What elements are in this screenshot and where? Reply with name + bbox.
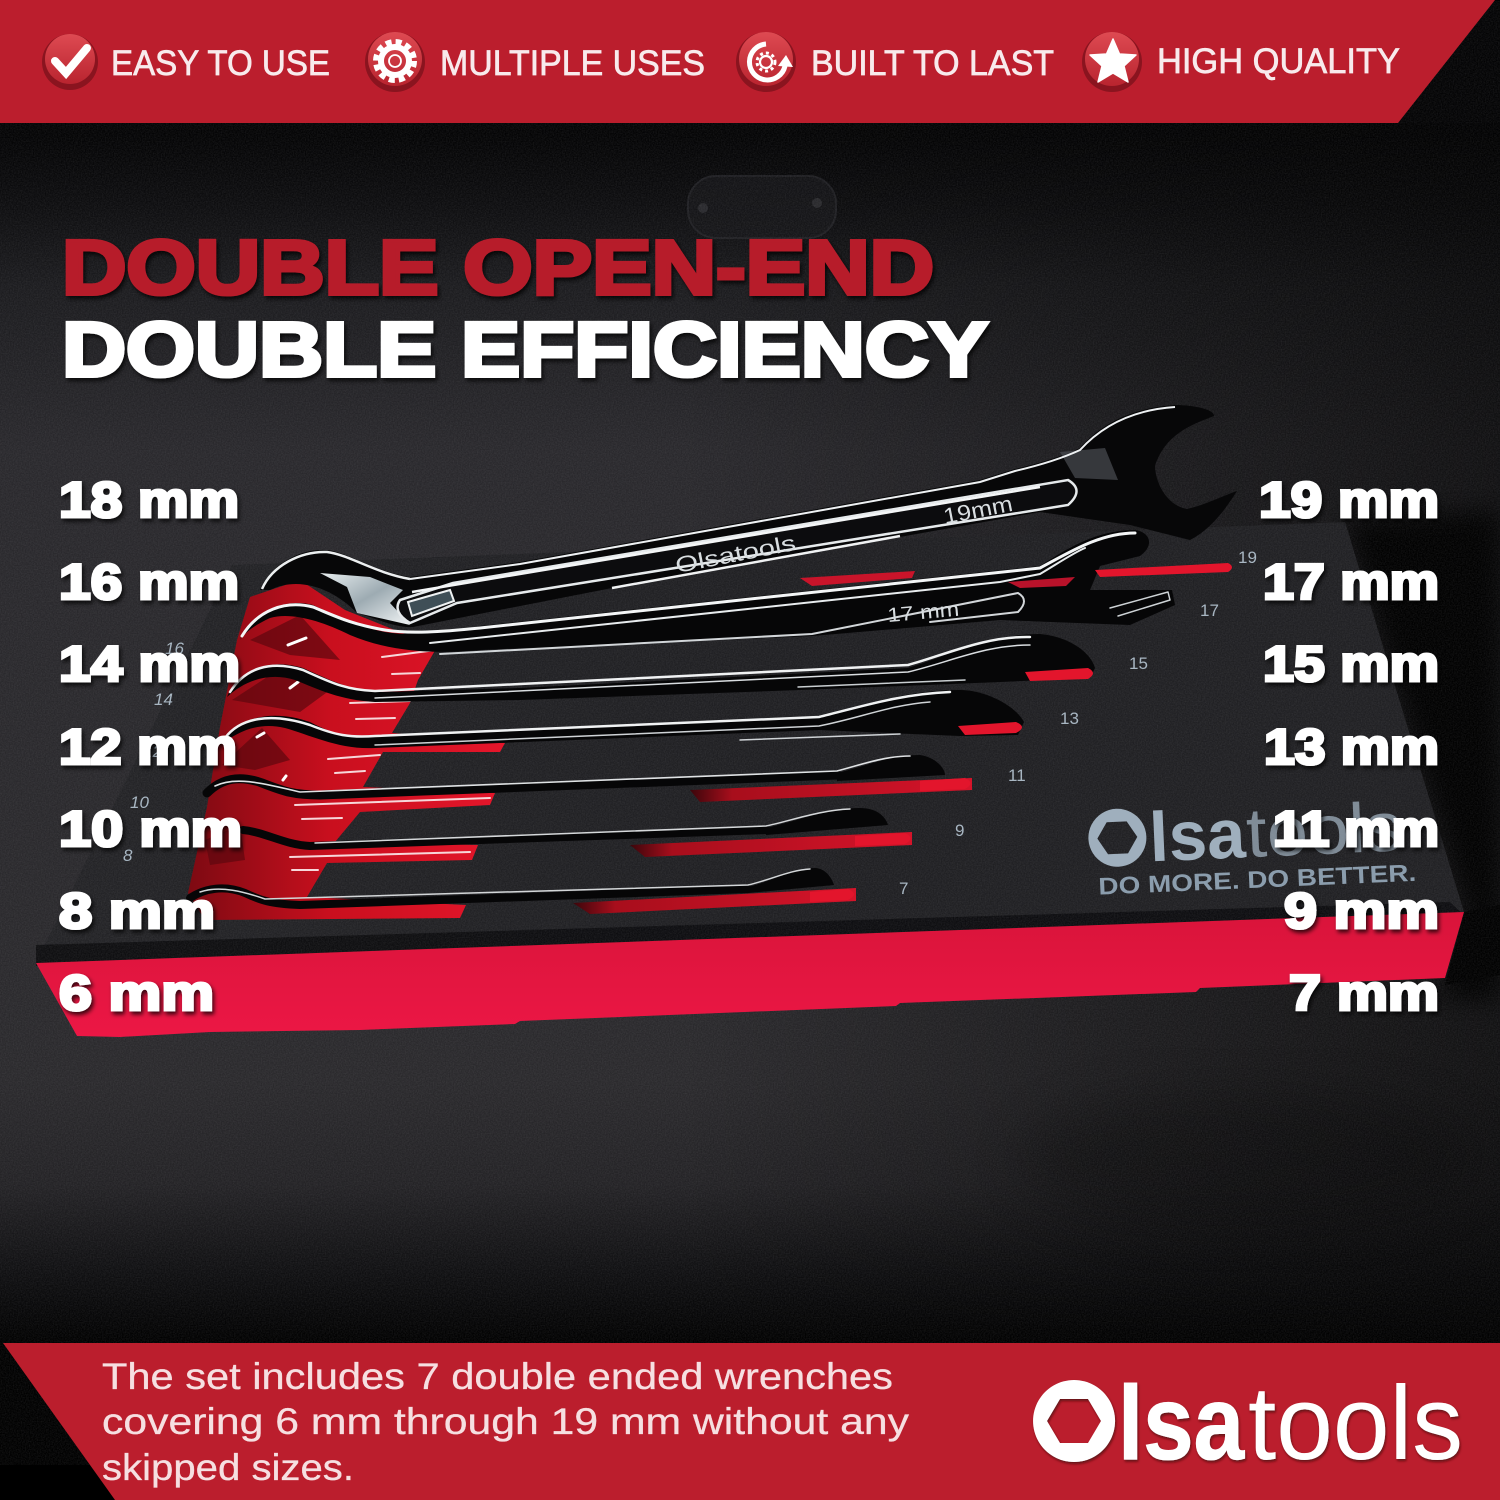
foam printed logo: lsa	[1148, 794, 1248, 876]
tray front dark lip	[36, 902, 1464, 966]
ring slot	[398, 480, 1076, 623]
shine lines	[262, 407, 1175, 592]
right size labels: 17 mm	[1263, 554, 1439, 610]
description text: covering 6 mm through 19 mm without any	[102, 1401, 910, 1442]
wrench engraving: 17 mm	[887, 599, 960, 627]
right size labels: 19 mm	[1259, 472, 1439, 528]
foam size numbers: 9	[955, 821, 964, 840]
right size labels	[1259, 472, 1439, 1021]
foam size numbers: 11	[1008, 766, 1026, 785]
heading	[62, 225, 988, 393]
left size labels: 8 mm	[59, 883, 215, 939]
label: multiple uses: MULTIPLE USES	[440, 44, 705, 83]
left size labels	[59, 472, 242, 1021]
foam size numbers: 15	[1129, 654, 1148, 673]
foam size numbers: 14	[154, 690, 173, 709]
foam printed logo: DO MORE. DO BETTER.	[1098, 860, 1417, 901]
description text	[102, 1356, 910, 1488]
right size labels: 7 mm	[1289, 965, 1439, 1021]
Olsatools logo: lsa	[1118, 1365, 1245, 1482]
wrench 6-7 mm	[190, 868, 834, 905]
icon: built to last cycle	[736, 32, 796, 92]
foam size numbers	[123, 548, 1257, 898]
foam size numbers: 8	[123, 846, 133, 865]
foam logo hex mark	[1087, 808, 1148, 868]
open jaw gloss	[1060, 448, 1118, 480]
top banner	[0, 0, 1495, 123]
heading line 2: DOUBLE EFFICIENCY	[62, 307, 988, 393]
tray top surface	[36, 522, 1464, 963]
foam size numbers: 10	[130, 793, 149, 812]
lower wrenches	[190, 530, 1175, 905]
icon: gear	[365, 32, 425, 92]
tray red front edge	[36, 912, 1464, 1037]
left size labels: 14 mm	[59, 636, 240, 692]
bottom banner	[3, 1343, 1500, 1500]
foam size numbers: 19	[1238, 548, 1257, 567]
description text: The set includes 7 double ended wrenches	[102, 1356, 893, 1397]
wrench 8-9 mm	[243, 808, 888, 846]
left size labels: 6 mm	[59, 965, 214, 1021]
icon: star	[1082, 32, 1142, 92]
wrench engraving	[673, 491, 1015, 627]
right size labels: 15 mm	[1263, 636, 1439, 692]
red slot ends	[800, 563, 1232, 902]
right-end slot strips	[690, 778, 972, 802]
left size labels: 12 mm	[59, 719, 237, 775]
right size labels: 9 mm	[1284, 883, 1439, 939]
dark reflections on red	[205, 615, 340, 865]
label: built to last: BUILT TO LAST	[811, 44, 1054, 83]
wrench 10-11 mm	[207, 755, 945, 795]
wrench 14-15 mm	[227, 634, 1095, 702]
red foam cutouts	[188, 580, 972, 920]
wrench 12-13 mm	[220, 690, 1024, 748]
right size labels: 11 mm	[1273, 801, 1439, 857]
polished head	[320, 573, 410, 625]
left size labels: 18 mm	[59, 472, 239, 528]
Olsatools logo	[1033, 1365, 1463, 1482]
wrench engraving: 19mm	[941, 491, 1015, 529]
foam size numbers: 12	[143, 742, 162, 761]
tray shadow	[1445, 905, 1500, 985]
foam size numbers: 17	[1200, 601, 1219, 620]
description text: skipped sizes.	[102, 1447, 354, 1488]
foam printed logo: tools	[1245, 787, 1404, 872]
shine lines on red	[257, 638, 490, 870]
label: easy to use: EASY TO USE	[111, 44, 330, 83]
foam printed logo	[1087, 787, 1417, 901]
wrench engraving: Olsatools	[673, 530, 798, 578]
Olsatools logo: tools	[1248, 1365, 1463, 1482]
left size labels: 16 mm	[59, 554, 239, 610]
icon: check	[42, 34, 98, 90]
foam size numbers: 16	[165, 639, 184, 658]
wall plate in background	[688, 176, 836, 238]
heading line 1: DOUBLE OPEN-END	[62, 225, 934, 311]
foam size numbers: 7	[899, 879, 908, 898]
largest wrench 18-19 mm	[260, 405, 1237, 627]
wrench 16-17 mm	[240, 530, 1175, 654]
label: high quality: HIGH QUALITY	[1157, 42, 1400, 81]
left size labels: 10 mm	[59, 801, 242, 857]
foam size numbers: 13	[1060, 709, 1079, 728]
right size labels: 13 mm	[1264, 719, 1439, 775]
